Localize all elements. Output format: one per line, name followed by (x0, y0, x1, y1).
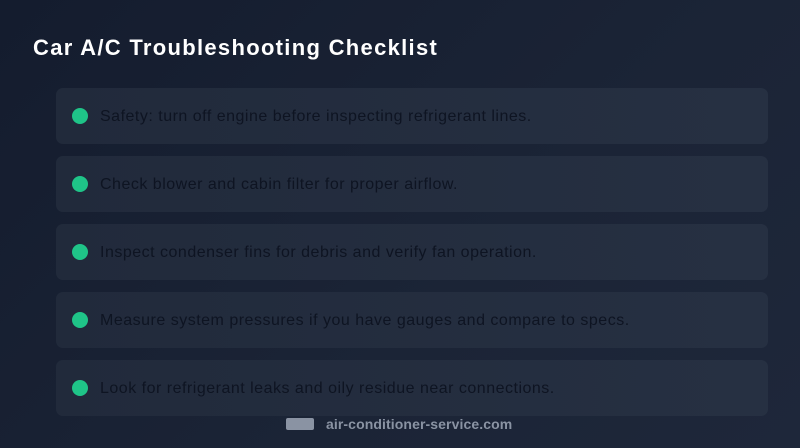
item 1 (56, 88, 768, 144)
footer: air-conditioner-service.com (326, 416, 512, 432)
item 5 (56, 360, 768, 416)
item 1: Safety: turn off engine before inspecting refrigerant lines. (100, 108, 532, 125)
item 2 (56, 156, 768, 212)
item 3 (56, 224, 768, 280)
item 4 (56, 292, 768, 348)
item 3: Inspect condenser fins for debris and verify fan operation. (100, 244, 537, 261)
item 2: Check blower and cabin filter for proper airflow. (100, 176, 458, 193)
title: Car A/C Troubleshooting Checklist (33, 35, 438, 60)
item 5: Look for refrigerant leaks and oily residue near connections. (100, 380, 555, 397)
item 4: Measure system pressures if you have gauges and compare to specs. (100, 312, 630, 329)
icon: AC unit (286, 418, 314, 430)
